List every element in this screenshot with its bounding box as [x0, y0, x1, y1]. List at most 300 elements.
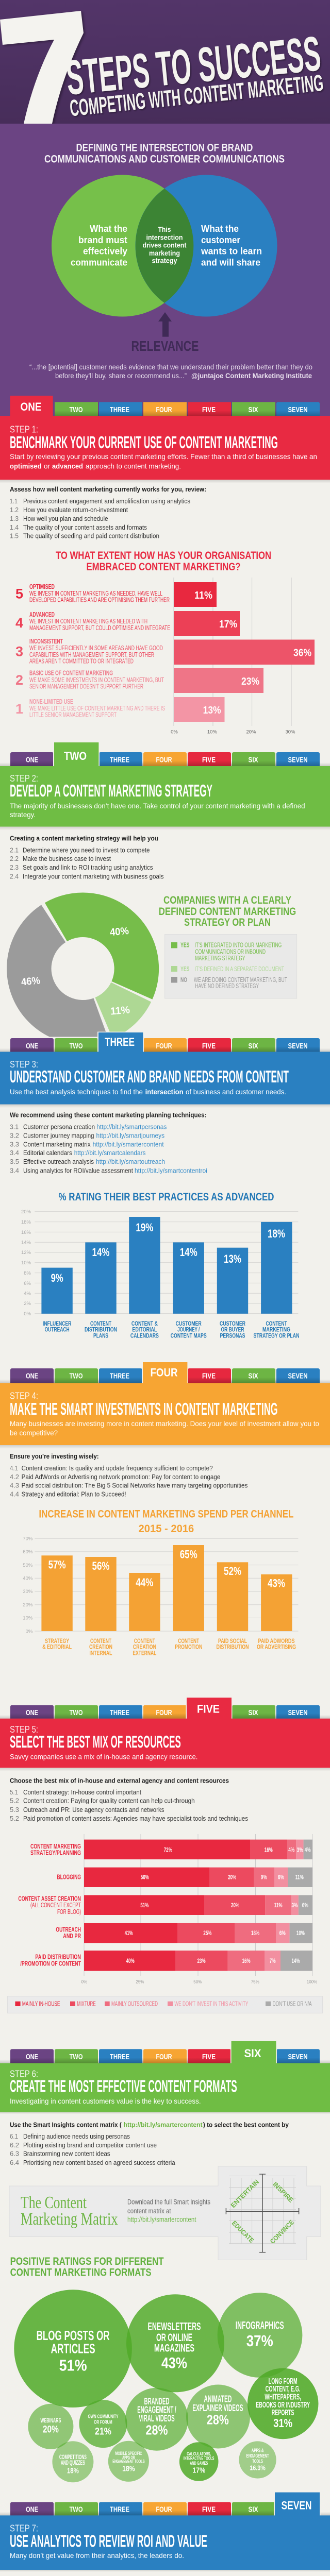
bar chart: spend per channel: CONTENT [90, 1637, 111, 1645]
row: blogging [57, 1868, 312, 1887]
heading: companies with a strategy: COMPANIES WITH A CLEARLY [163, 894, 291, 906]
matrix download text: http://bit.ly/smartercontent [127, 2216, 196, 2224]
row: paid distribution: /PROMOTION OF CONTENT [20, 1960, 81, 1967]
row: optimised: DEVELOPED CAPABILITIES AND ARE OPTIMISING THEM FURTHER [29, 597, 170, 604]
bubble: competitions: 18% [67, 2466, 79, 2475]
active tab one: ONE [21, 400, 41, 413]
active tab five: FIVE [197, 1702, 220, 1715]
row: none-limited use: 1 [15, 701, 23, 717]
bar chart: spend per channel: 57% [48, 1558, 66, 1571]
donut chart: defined strategy: 46% [21, 975, 41, 988]
row: outreach and PR: 10% [296, 1930, 305, 1937]
bar chart: spend per channel: OR ADVERTISING [257, 1643, 296, 1651]
bubble: blog posts: ARTICLES [51, 2341, 95, 2356]
bar chart: spend per channel: 60% [23, 1549, 33, 1555]
bar chart: best practices: 13% [224, 1252, 241, 1265]
axis labels: 30% [285, 730, 295, 735]
bar chart: spend per channel: CREATION [89, 1643, 112, 1651]
bar chart: best practices: 14% [92, 1246, 109, 1259]
bubble: webinars: WEBINARS [40, 2417, 61, 2424]
bubble: blog posts: BLOG POSTS OR [37, 2328, 110, 2343]
bar chart: spend per channel: 50% [23, 1563, 33, 1568]
bubble: own community: 21% [95, 2426, 111, 2437]
legend: strategy: HAVE NO DEFINED STRATEGY [195, 982, 259, 990]
matrix title: Marketing Matrix [21, 2210, 118, 2229]
legend: strategy: NO [180, 976, 187, 984]
row: content asset creation: FOR BLOG) [57, 1908, 81, 1916]
bar chart: best practices: DISTRIBUTION [85, 1326, 117, 1333]
active tab five [186, 1697, 232, 1720]
step tabs: step 5: TWO [69, 1708, 83, 1717]
bubble: long form content [256, 2377, 310, 2430]
step tabs: step 2: ONE [26, 755, 38, 764]
bar chart: spend per channel: 40% [23, 1575, 33, 1582]
bubble: animated explainer videos: ANIMATED [204, 2394, 232, 2404]
step 6 checklist: 6.2 [10, 2141, 19, 2149]
row: none-limited use: LITTLE SENIOR MANAGEMENT SUPPORT [29, 711, 117, 719]
step 4 checklist [10, 1452, 248, 1498]
row: content marketing strategy: 16% [265, 1848, 273, 1854]
bubble chart: content formats [14, 2290, 319, 2482]
matrix diagram: CONVINCE [269, 2218, 295, 2245]
bar chart: best practices: CONTENT [266, 1320, 287, 1327]
step 4 checklist: 4.4 [10, 1490, 19, 1498]
step 1 checklist: Previous content engagement and amplification using analytics [23, 497, 190, 505]
step 1 checklist: The quality of your content assets and formats [23, 523, 147, 531]
step tabs: step 5: SIX [249, 1708, 258, 1717]
bubble: animated explainer videos [192, 2394, 243, 2428]
bar chart: best practices [21, 1209, 299, 1339]
legend: resource mix: MAINLY OUTSOURCED [111, 2001, 158, 2008]
axis labels: 0% [81, 1980, 87, 1985]
step tabs: step 6: FOUR [156, 2053, 172, 2061]
step 3 checklist: 3.5 [10, 1158, 19, 1165]
step tabs: step 3: FOUR [156, 1042, 172, 1050]
step 3 checklist: http://bit.ly/smartpersonas [96, 1123, 167, 1131]
bubble: blog posts [37, 2328, 110, 2375]
step tabs: step 6: ONE [26, 2053, 38, 2061]
bubble: long form content: 31% [273, 2416, 292, 2430]
bar chart: spend per channel: 0% [26, 1629, 33, 1634]
row: content marketing strategy: CONTENT MARKETING [30, 1843, 81, 1850]
bar chart: spend per channel: 44% [136, 1576, 153, 1589]
step tabs: step 1: TWO [69, 405, 83, 414]
bubble: infographics: INFOGRAPHICS [236, 2319, 284, 2331]
step tabs: step 1 [10, 396, 320, 418]
step tabs: step 4: TWO [69, 1371, 83, 1381]
step tabs: step 4: FIVE [202, 1371, 216, 1381]
legend: strategy: YES [180, 942, 190, 949]
bar chart: best practices: JOURNEY / [177, 1326, 200, 1333]
bubble: long form content: REPORTS [272, 2409, 294, 2417]
row: paid distribution [20, 1951, 312, 1971]
step 4 checklist: 4.3 [10, 1482, 19, 1489]
bar chart: spend per channel: CONTENT [134, 1637, 155, 1645]
row: blogging: 56% [141, 1874, 149, 1880]
step 2 intro text [10, 802, 305, 819]
row: outreach and PR: 25% [203, 1930, 211, 1937]
bubble: apps: TOOLS [252, 2459, 263, 2464]
step 6 checklist: Prioritising new content based on agreed success criteria [23, 2159, 175, 2166]
bubble: branded engagement [137, 2396, 176, 2438]
step 5 checklist: Paid promotion of content assets: Agencies may have specialist tools and techniques [23, 1815, 248, 1822]
step 4 checklist: Content creation: Is quality and update frequency sufficient to compete? [22, 1464, 213, 1472]
step 3 intro text [10, 1088, 286, 1096]
quote: before they’ll buy, share or recommend us...” [55, 371, 187, 380]
step 6 checklist: Use the Smart Insights content matrix ( [10, 2121, 122, 2129]
panel: step 7 banner [0, 2515, 330, 2572]
relevance label: RELEVANCE [131, 338, 199, 354]
bar chart: best practices: 4% [24, 1291, 31, 1296]
step 5 checklist: Content creation: Paying for quality content can help cut-through [23, 1797, 195, 1805]
step 4 checklist: 4.2 [10, 1473, 19, 1481]
step tabs: step 4: THREE [110, 1371, 129, 1381]
row: outreach and PR: 6% [279, 1930, 286, 1937]
bubble: infographics [236, 2319, 284, 2350]
step tabs: step 2: FIVE [202, 755, 216, 764]
bubble: long form content: WHITEPAPERS, [265, 2393, 301, 2402]
step 2 checklist: Set goals and link to ROI tracking using analytics [23, 863, 153, 871]
row: content marketing strategy: 3% [297, 1848, 303, 1854]
bar chart: spend per channel: CREATION [133, 1643, 156, 1651]
bar chart: best practices: 2% [24, 1301, 31, 1307]
axis labels: 25% [136, 1980, 144, 1985]
matrix download text: content matrix at [127, 2207, 171, 2215]
row: none-limited use: NONE-LIMITED USE [29, 698, 73, 705]
bar chart: best practices: CONTENT MAPS [171, 1332, 207, 1339]
step 3 checklist: Customer persona creation [23, 1123, 95, 1131]
row: advanced: MANAGEMENT SUPPORT, BUT COULD OPTIMISE AND INTEGRATE [29, 624, 170, 632]
bar chart: spend per channel: INTERNAL [90, 1649, 112, 1656]
bar chart: best practices: CALENDARS [130, 1332, 159, 1339]
row: advanced: 4 [15, 615, 23, 631]
row: inconsistent: 36% [293, 647, 311, 658]
bubble: branded engagement: BRANDED [144, 2396, 170, 2406]
venn centre text: intersection [146, 233, 183, 242]
bar chart: spend per channel: 30% [23, 1589, 33, 1595]
venn centre text: drives content [142, 241, 187, 249]
step tabs: step 6: FIVE [202, 2053, 216, 2061]
bar chart: best practices: CUSTOMER [176, 1320, 202, 1327]
step 6 checklist: 6.4 [10, 2159, 19, 2166]
step 4 checklist: Ensure you’re investing wisely: [10, 1452, 99, 1460]
step tabs: step 5 [0, 1697, 330, 1721]
arrow: relevance [158, 312, 172, 337]
active tab one [10, 396, 53, 417]
venn diagram [52, 175, 277, 316]
bar chart: best practices: CONTENT [90, 1320, 111, 1327]
row: inconsistent: CAPABILITIES WITH MANAGEMENT SUPPORT, BUT OTHER [29, 651, 154, 658]
bar chart: spend per channel: 52% [224, 1565, 241, 1578]
bar chart: spend per channel: 10% [23, 1616, 33, 1621]
step tabs: step 1: SIX [249, 405, 258, 414]
row: blogging: 20% [228, 1874, 236, 1880]
step tabs: step 1: SEVEN [288, 405, 307, 414]
step 5 checklist: 5.2 [10, 1797, 19, 1805]
bar chart: best practices: PLANS [93, 1332, 108, 1339]
quote: @juntajoe Content Marketing Institute [191, 371, 312, 380]
step 3 checklist: We recommend using these content marketing planning techniques: [10, 1111, 207, 1119]
step 1 checklist: 1.3 [10, 515, 19, 522]
step 3 checklist: 3.4 [10, 1167, 19, 1175]
step 5 checklist: Outreach and PR: Use agency contacts and networks [23, 1806, 164, 1814]
panel: step 7 banner: STEP 7: [10, 2523, 38, 2533]
panel: step 5 banner: STEP 5: [10, 1724, 38, 1735]
row: optimised: OPTIMISED [29, 583, 55, 590]
bar chart: best practices: 18% [268, 1227, 285, 1240]
active tab four: FOUR [151, 1366, 178, 1379]
heading: chart maturity [56, 550, 271, 573]
matrix download text: Download the full Smart Insights [127, 2198, 210, 2206]
row: content asset creation: CONTENT ASSET CREATION [18, 1895, 81, 1902]
step 3 checklist: 3.2 [10, 1132, 19, 1140]
bar chart: spend per channel: DISTRIBUTION [217, 1643, 249, 1651]
row: content asset creation: 3% [291, 1903, 298, 1909]
venn left text [71, 223, 128, 268]
step tabs: step 5: SEVEN [288, 1708, 307, 1717]
heading: content formats: POSITIVE RATINGS FOR DIFFERENT [10, 2256, 164, 2267]
panel: step 4 banner: STEP 4: [10, 1391, 38, 1401]
venn left text: effectively [83, 245, 128, 257]
matrix diagram: EDUCATE [230, 2219, 256, 2244]
row: inconsistent: 3 [15, 644, 23, 659]
row: inconsistent: INCONSISTENT [29, 638, 63, 645]
bar chart: spend per channel: 56% [92, 1560, 109, 1572]
step 5 checklist: 5.1 [10, 1788, 18, 1796]
step 1 checklist: 1.5 [10, 532, 19, 540]
step tabs: step 3: ONE [26, 1042, 38, 1050]
row: content marketing strategy: 4% [288, 1848, 294, 1854]
step 3 checklist: Using analytics for ROI/value assessment [23, 1167, 133, 1175]
row: advanced [15, 611, 240, 636]
step 3 checklist: 3.3 [10, 1140, 19, 1148]
bubble: enewsletters: ENEWSLETTERS [147, 2320, 201, 2333]
step tabs: step 6: THREE [110, 2053, 129, 2061]
step 3 checklist [10, 1111, 207, 1175]
row: blogging: 11% [295, 1874, 304, 1880]
legend: strategy: MARKETING STRATEGY [195, 955, 245, 962]
row: content marketing strategy: STRATEGY/PLANNING [30, 1850, 81, 1857]
step tabs: step 3 [0, 1031, 330, 1055]
bar chart: best practices: 0% [24, 1311, 31, 1317]
step tabs: step 2 [0, 742, 330, 769]
step tabs: step 7 [0, 2492, 330, 2518]
bubble: animated explainer videos: 28% [207, 2412, 229, 2428]
step 6 checklist: Plotting existing brand and competitor content use [23, 2141, 157, 2149]
row: outreach and PR: AND PR [63, 1933, 81, 1940]
step 2 checklist: Make the business case to invest [23, 855, 111, 862]
step 4 checklist: Paid AdWords or Advertising network promotion: Pay for content to engage [22, 1473, 220, 1481]
active tab three [97, 1031, 144, 1053]
row: content asset creation [18, 1895, 312, 1916]
step 6 checklist: Brainstorming new content ideas [23, 2150, 110, 2158]
step tabs: step 7: SIX [249, 2505, 258, 2514]
active tab four [142, 1361, 188, 1384]
step 3 checklist: http://bit.ly/smartoutreach [96, 1158, 165, 1165]
heading: chart maturity: TO WHAT EXTENT HOW HAS YOUR ORGANISATION [56, 550, 271, 562]
bar chart: best practices: CONTENT & [131, 1320, 158, 1327]
row: outreach and PR: 18% [251, 1930, 259, 1937]
panel: step 4 banner [0, 1383, 330, 1449]
step tabs: step 7: ONE [26, 2505, 38, 2514]
bubble: calculators: 17% [192, 2466, 205, 2475]
donut chart: defined strategy [9, 895, 156, 1042]
step 1 intro text [10, 452, 317, 470]
step 2 checklist: 2.4 [10, 872, 19, 880]
step tabs: step 1: FOUR [156, 405, 172, 414]
step 3 checklist: http://bit.ly/smartcontentroi [135, 1167, 207, 1175]
step 2 checklist: 2.3 [10, 863, 19, 871]
step tabs: step 7: FIVE [202, 2505, 216, 2514]
step 3 checklist: http://bit.ly/smartcalendars [74, 1149, 146, 1157]
bubble: calculators: AND GAMES [190, 2461, 208, 2466]
step 6 checklist: 6.1 [10, 2132, 18, 2140]
row: basic use: 23% [241, 676, 259, 687]
step 6 intro text: Investigating in content customers value is the key to success. [10, 2097, 201, 2105]
legend: strategy: YES [180, 965, 190, 973]
row: none-limited use: 13% [203, 705, 221, 716]
row: advanced: 17% [219, 619, 237, 630]
step 2 checklist [10, 835, 164, 880]
step 1 checklist: 1.2 [10, 506, 19, 514]
bar chart: best practices: 6% [24, 1281, 31, 1286]
bubble: blog posts: 51% [59, 2357, 87, 2375]
bar chart: best practices: 20% [21, 1209, 31, 1215]
bar chart: spend per channel: STRATEGY [45, 1637, 69, 1645]
row: content marketing strategy: 4% [305, 1848, 311, 1854]
heading: content formats [10, 2256, 164, 2278]
quote [29, 363, 312, 380]
row: optimised: 11% [194, 590, 212, 601]
row: blogging: BLOGGING [57, 1874, 81, 1881]
step 2 checklist: Creating a content marketing strategy will help you [10, 835, 158, 842]
row: optimised [15, 582, 217, 607]
step 3 checklist: Editorial calendars [23, 1149, 72, 1157]
step 6 checklist: Defining audience needs using personas [23, 2132, 130, 2140]
active tab three: THREE [105, 1036, 135, 1048]
step 1 checklist: 1.4 [10, 523, 19, 531]
row: advanced: ADVANCED [29, 611, 55, 618]
row: advanced: WE INVEST IN CONTENT MARKETING AS NEEDED WITH [29, 618, 147, 625]
axis labels: 75% [251, 1980, 259, 1985]
step tabs: step 1: FIVE [202, 405, 216, 414]
step tabs: step 4: SEVEN [288, 1371, 307, 1381]
bubble: long form content: CONTENT, E.G. [266, 2385, 301, 2394]
step 1 checklist [10, 485, 206, 540]
step 5 checklist: 5.2 [10, 1815, 19, 1822]
step tabs: step 7: TWO [69, 2505, 83, 2514]
row: optimised: 5 [15, 586, 23, 602]
venn right text: and will share [201, 257, 260, 268]
row: basic use [15, 668, 263, 693]
heading: content formats: CONTENT MARKETING FORMATS [10, 2267, 152, 2278]
bubble: competitions: COMPETITIONS [59, 2453, 87, 2461]
legend: strategy: COMMUNICATIONS OR INBOUND [195, 948, 266, 955]
step 1 checklist: How you evaluate return-on-investment [23, 506, 128, 514]
step tabs: step 3: SEVEN [288, 1042, 307, 1050]
venn right text: customer [201, 234, 240, 245]
legend: resource mix: MIXTURE [77, 2001, 96, 2008]
title numeral 7 [0, 11, 84, 124]
step 2 checklist: 2.1 [10, 846, 19, 854]
bar chart: best practices: MARKETING [262, 1326, 290, 1333]
row: inconsistent [15, 638, 315, 665]
bubble: webinars [40, 2417, 61, 2435]
bar chart: spend per channel: CONTENT [178, 1637, 200, 1645]
step 2 intro text: The majority of businesses don’t have one. Take control of your content marketing with a defined [10, 802, 305, 810]
step 3 checklist: Effective outreach analysis [23, 1158, 94, 1165]
venn left text: What the [90, 223, 127, 234]
row: content asset creation: (ALL CONCENT EXCEPT [30, 1902, 81, 1909]
step 1 checklist: 1.1 [10, 497, 18, 505]
row: paid distribution: 16% [242, 1958, 251, 1964]
step tabs: step 7: FOUR [156, 2505, 172, 2514]
active tab six [230, 2040, 277, 2064]
venn centre text: strategy [152, 257, 177, 265]
row: content asset creation: 6% [302, 1903, 308, 1909]
row: basic use: SENIOR MANAGEMENT DOESN’T SUPPORT FURTHER [29, 683, 143, 690]
row: basic use: WE MAKE SOME INVESTMENTS IN CONTENT MARKETING, BUT [29, 676, 164, 684]
panel: step 5 banner [0, 1719, 330, 1771]
legend: resource mix: MAINLY IN-HOUSE [22, 2001, 60, 2008]
step 1 intro text: approach to content marketing. [86, 462, 181, 470]
step 5 checklist [10, 1776, 248, 1822]
row: blogging: 9% [261, 1874, 267, 1880]
step 5 checklist: Choose the best mix of in-house and external agency and content resources [10, 1776, 229, 1784]
row: optimised: WE INVEST IN CONTENT MARKETING AS NEEDED, HAVE WELL [29, 590, 162, 597]
heading: companies with a strategy [159, 894, 296, 928]
matrix diagram: INSPIRE [271, 2180, 295, 2204]
bubble: apps [246, 2448, 269, 2472]
bubble: branded engagement: VIRAL VIDEOS [139, 2413, 175, 2424]
bubble: apps: APPS & [252, 2448, 263, 2453]
step tabs: step 3: TWO [69, 1042, 83, 1050]
step 5 checklist: Content strategy: In-house control important [23, 1788, 141, 1796]
legend: strategy [165, 935, 297, 998]
heading: chart maturity: EMBRACED CONTENT MARKETING? [87, 561, 240, 573]
step tabs: step 3: FIVE [202, 1042, 216, 1050]
donut chart: defined strategy: 11% [110, 1004, 130, 1018]
step 7 intro text: Many don’t get value from their analytics, the leaders do. [10, 2551, 184, 2560]
donut chart: defined strategy: 40% [109, 925, 129, 938]
step 1 intro text: advanced [52, 462, 83, 470]
bubble: enewsletters [147, 2320, 201, 2372]
row: content marketing strategy [30, 1840, 312, 1859]
bar chart: spend per channel: PROMOTION [175, 1643, 202, 1651]
heading: spend per channel chart [39, 1509, 294, 1535]
step 5 intro text: Savvy companies use a mix of in-house and agency resource. [10, 1753, 198, 1761]
row: paid distribution: 7% [270, 1958, 276, 1964]
panel: step 3 banner: STEP 3: [10, 1059, 38, 1070]
step tabs: step 4: ONE [26, 1371, 38, 1381]
legend: resource mix: WE DON’T INVEST IN THIS ACTIVITY [174, 2001, 249, 2008]
step tabs: step 3: SIX [249, 1042, 258, 1050]
step tabs: step 4 [0, 1361, 330, 1385]
step tabs: step 2: FOUR [156, 755, 172, 764]
bubble: competitions [59, 2453, 87, 2475]
bubble: animated explainer videos: EXPLAINER VIDEOS [192, 2403, 243, 2413]
axis labels [171, 730, 295, 735]
row: outreach and PR: OUTREACH [56, 1926, 81, 1933]
panel: step 2 banner: STEP 2: [10, 773, 38, 784]
step 1 checklist: Assess how well content marketing currently works for you, review: [10, 485, 206, 493]
panel: step 6 banner: STEP 6: [10, 2069, 38, 2079]
step 1 intro text: optimised [10, 462, 42, 470]
stacked bar chart: resource mix [18, 1834, 317, 1985]
bar chart: best practices: 14% [21, 1240, 31, 1246]
panel: step 1 banner: STEP 1: [10, 425, 38, 435]
bubble: own community: OR FORUM [94, 2419, 112, 2426]
